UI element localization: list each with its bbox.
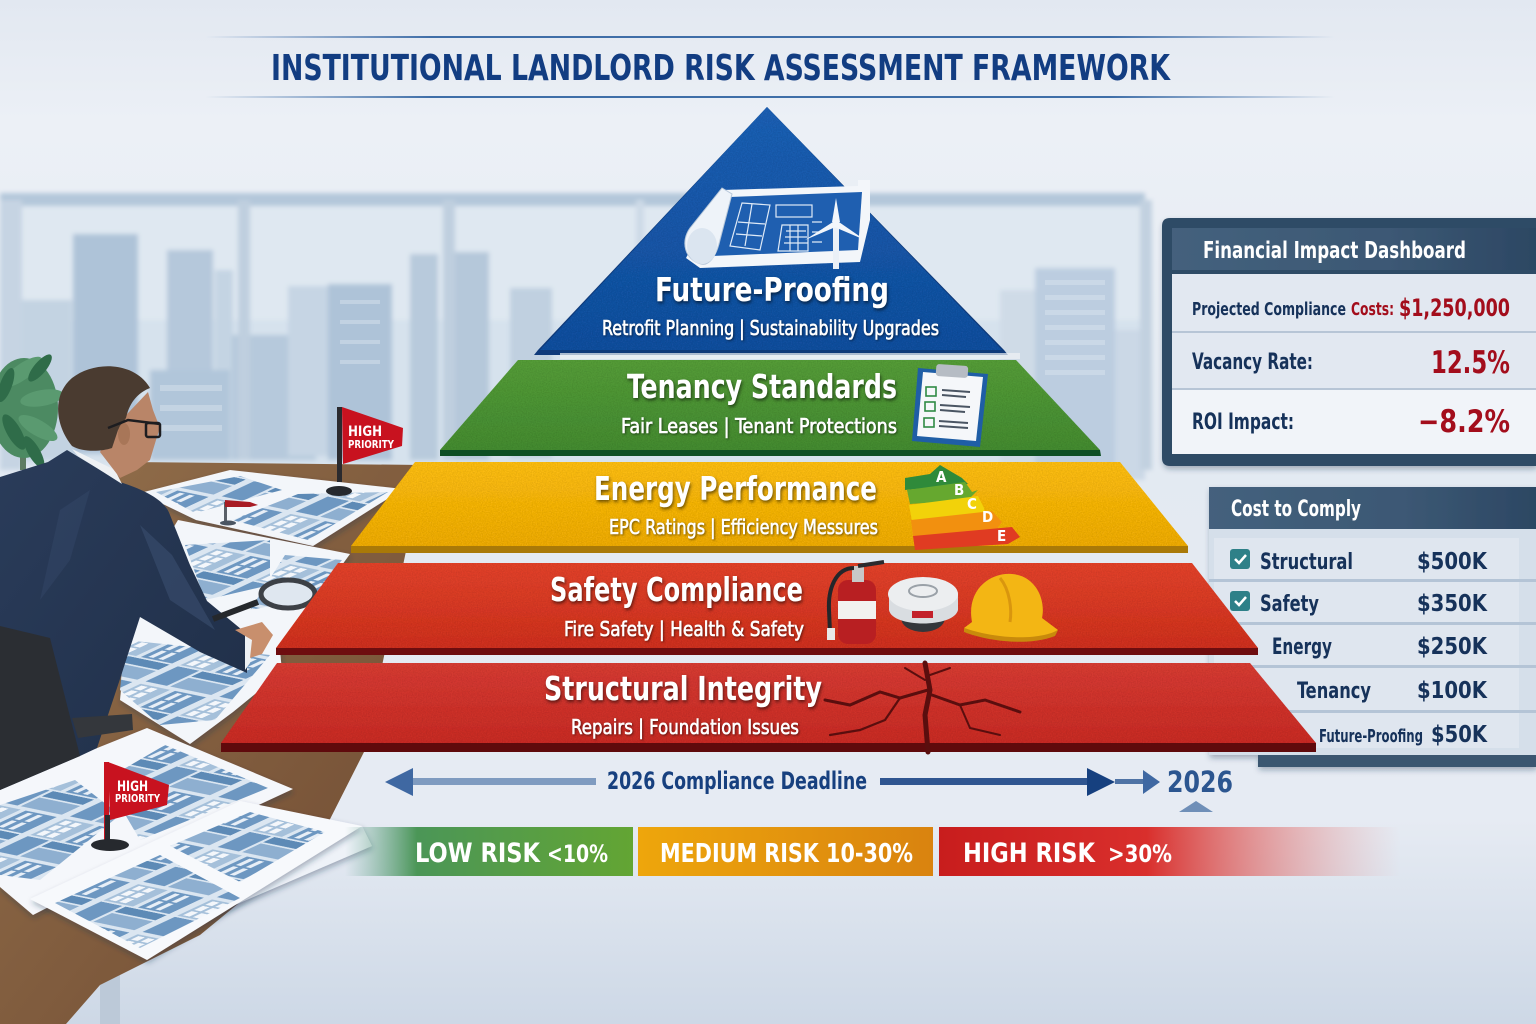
subtitle: future-proofing: Retrofit Planning | Sustainability Upgrades bbox=[602, 316, 939, 340]
subtitle: tenancy standards: Fair Leases | Tenant Protections bbox=[621, 414, 897, 438]
cuff bbox=[245, 635, 254, 670]
dashboard header: Financial Impact Dashboard bbox=[1203, 238, 1466, 264]
tier: safety compliance bbox=[276, 562, 1258, 655]
heading: structural integrity: Structural Integrity bbox=[544, 669, 822, 708]
flag: small folded marker bbox=[220, 500, 258, 526]
high risk: HIGH RISK bbox=[963, 838, 1096, 869]
compliance deadline timeline bbox=[385, 765, 1233, 812]
row: energy bbox=[1272, 634, 1488, 660]
icon: hard hat bbox=[964, 574, 1058, 642]
cost header bbox=[1209, 487, 1536, 529]
tier: tenancy standards bbox=[440, 360, 1101, 456]
tier: structural integrity bbox=[221, 663, 1316, 752]
panel: cost to comply bbox=[1209, 487, 1536, 767]
high risk bbox=[939, 827, 1400, 876]
icon: EPC rating chart: C bbox=[967, 495, 977, 513]
sheet: far blueprint bbox=[140, 470, 403, 546]
panel: financial impact dashboard bbox=[1162, 218, 1536, 466]
chair bbox=[0, 626, 80, 790]
neck and face bbox=[100, 392, 160, 478]
row: tenancy: Tenancy bbox=[1297, 679, 1371, 704]
flag: high priority, back: PRIORITY bbox=[348, 439, 394, 451]
row: ROI impact: ROI Impact: bbox=[1192, 410, 1294, 435]
low risk bbox=[345, 827, 633, 876]
title: INSTITUTIONAL LANDLORD RISK ASSESSMENT FRAMEWORK bbox=[271, 48, 1172, 89]
row: tenancy: $100K bbox=[1417, 678, 1488, 704]
flag: high priority, back: HIGH bbox=[348, 424, 382, 440]
flag: high priority, front bbox=[91, 762, 169, 851]
row: safety bbox=[1230, 591, 1488, 617]
row: ROI impact: −8.2% bbox=[1418, 404, 1510, 440]
row: future-proofing: Future-Proofing bbox=[1319, 726, 1423, 747]
row: projected compliance costs: Projected Compliance bbox=[1192, 299, 1346, 320]
icon: EPC rating chart: A bbox=[936, 468, 947, 486]
year marker bbox=[1167, 765, 1233, 812]
plant bbox=[0, 351, 65, 471]
icon: clipboard checklist bbox=[912, 364, 988, 447]
row: ROI impact bbox=[1192, 404, 1510, 440]
row: energy: $250K bbox=[1417, 634, 1488, 660]
medium risk: MEDIUM RISK 10-30% bbox=[660, 839, 913, 869]
row: future-proofing bbox=[1319, 722, 1488, 748]
blueprints on desk bbox=[0, 470, 403, 960]
low risk: LOW RISK bbox=[415, 838, 541, 869]
arrow: left bbox=[385, 768, 596, 796]
hair bbox=[58, 366, 150, 451]
sheet: middle blueprint bbox=[120, 520, 350, 744]
glasses bbox=[108, 420, 160, 437]
subtitle: safety compliance: Fire Safety | Health & Safety bbox=[564, 617, 804, 641]
row: safety: Safety bbox=[1260, 592, 1319, 617]
row: safety: $350K bbox=[1417, 591, 1488, 617]
person reviewing documents bbox=[0, 366, 315, 790]
risk legend bar bbox=[345, 827, 1400, 876]
row: vacancy rate: Vacancy Rate: bbox=[1192, 350, 1313, 375]
row: projected compliance costs: Costs: bbox=[1351, 299, 1394, 320]
dashboard header bbox=[1172, 228, 1536, 270]
tier: energy performance bbox=[351, 462, 1188, 553]
medium risk bbox=[638, 827, 933, 876]
heading: future-proofing: Future-Proofing bbox=[655, 270, 889, 309]
armrest bbox=[72, 714, 133, 738]
heading: safety compliance: Safety Compliance bbox=[550, 570, 803, 609]
icon: blueprint and wind turbine bbox=[685, 180, 870, 269]
year marker: 2026 bbox=[1167, 765, 1233, 799]
row: energy: Energy bbox=[1272, 635, 1332, 660]
icon: EPC rating chart bbox=[905, 465, 1020, 550]
row: structural: Structural bbox=[1260, 550, 1353, 575]
collar bbox=[72, 449, 122, 484]
icon: EPC rating chart: B bbox=[954, 481, 964, 499]
row: structural bbox=[1230, 549, 1488, 575]
row: future-proofing: $50K bbox=[1431, 722, 1488, 748]
subtitle: energy performance: EPC Ratings | Efficiency Messures bbox=[609, 515, 878, 539]
suit bbox=[0, 450, 247, 790]
deadline label: 2026 Compliance Deadline bbox=[607, 767, 867, 795]
low risk: <10% bbox=[547, 840, 608, 868]
cost header: Cost to Comply bbox=[1231, 497, 1361, 522]
flag: high priority, back bbox=[326, 407, 403, 496]
icon: foundation crack bbox=[825, 663, 1020, 752]
arrow: right bbox=[880, 768, 1160, 796]
row: projected compliance costs bbox=[1192, 294, 1510, 322]
magnifying glass bbox=[213, 580, 315, 619]
icon: EPC rating chart: D bbox=[982, 508, 993, 526]
high risk: >30% bbox=[1108, 840, 1172, 868]
heading: energy performance: Energy Performance bbox=[594, 469, 877, 508]
heading: tenancy standards: Tenancy Standards bbox=[627, 367, 897, 406]
tier: future-proofing bbox=[534, 107, 1020, 359]
icon: EPC rating chart: E bbox=[997, 527, 1006, 545]
icon: smoke detector bbox=[888, 577, 958, 632]
row: projected compliance costs: $1,250,000 bbox=[1399, 294, 1510, 322]
flag: high priority, front: PRIORITY bbox=[115, 793, 160, 805]
sheet: under layer bbox=[195, 826, 372, 920]
desk bbox=[0, 462, 424, 1024]
row: structural: $500K bbox=[1417, 549, 1488, 575]
row: vacancy rate bbox=[1192, 345, 1510, 381]
sheet: front blueprint bbox=[30, 801, 362, 960]
ear bbox=[118, 423, 130, 445]
icon: fire extinguisher bbox=[827, 562, 884, 644]
pyramid bbox=[221, 107, 1316, 752]
flag: high priority, front: HIGH bbox=[117, 779, 148, 795]
row: vacancy rate: 12.5% bbox=[1431, 345, 1510, 381]
row: tenancy bbox=[1297, 678, 1488, 704]
hand bbox=[235, 622, 273, 658]
subtitle: structural integrity: Repairs | Foundation Issues bbox=[571, 715, 799, 739]
sheet: front-left blueprint bbox=[0, 728, 293, 915]
